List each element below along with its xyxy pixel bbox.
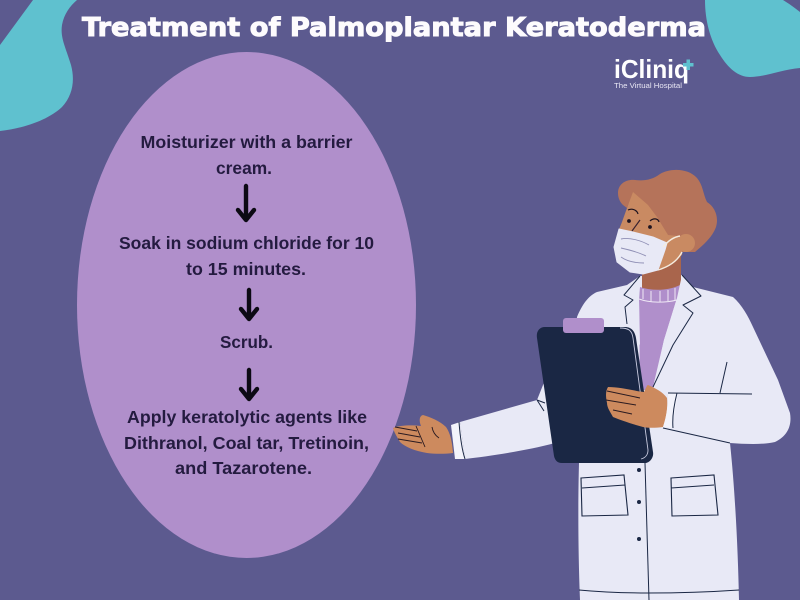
right pocket	[671, 475, 718, 516]
step 2 text: Soak in sodium chloride for 10	[119, 233, 374, 253]
left sleeve	[460, 380, 555, 459]
sleeve crease	[537, 400, 545, 411]
logo: iCliniq: The Virtual Hospital	[614, 81, 682, 90]
panel: treatment steps oval	[77, 52, 416, 558]
left lapel	[624, 276, 640, 345]
step 1 text: cream.	[216, 158, 272, 178]
step 4 text: Dithranol, Coal tar, Tretinoin,	[124, 433, 369, 453]
clipboard clip	[563, 318, 604, 333]
decorative blob: top left	[0, 0, 77, 131]
sweater collar	[639, 285, 680, 302]
decorative blob: top right	[705, 0, 800, 77]
step 2 text	[119, 233, 374, 279]
ear	[677, 234, 695, 252]
right cuff	[663, 393, 678, 428]
hair	[618, 170, 717, 252]
step 1 text	[140, 132, 353, 178]
title: Treatment of Palmoplantar Keratoderma	[82, 13, 706, 43]
clipboard	[537, 318, 653, 463]
step 3 text: Scrub.	[220, 332, 273, 352]
arrow 2	[241, 290, 257, 319]
step 4 text	[124, 407, 369, 478]
illustration: doctor	[393, 170, 790, 600]
step 4 text: Apply keratolytic agents like	[127, 407, 367, 427]
eyes and brows	[627, 209, 659, 231]
step 4 text: and Tazarotene.	[175, 458, 312, 478]
logo: iCliniq: iCliniq	[614, 54, 689, 84]
step 2 text: to 15 minutes.	[186, 259, 306, 279]
coat buttons	[637, 468, 641, 541]
pointing hand	[393, 415, 453, 454]
arrow 3	[241, 370, 257, 399]
face	[618, 190, 684, 270]
step 1 text: Moisturizer with a barrier	[140, 132, 353, 152]
holding hand	[606, 385, 667, 428]
arrow 1	[238, 186, 254, 220]
right lapel	[653, 275, 701, 387]
coat seams	[579, 362, 752, 600]
left cuff	[451, 422, 465, 459]
face mask	[614, 229, 682, 274]
coat body	[570, 275, 790, 600]
neck	[642, 250, 681, 293]
left pocket	[581, 475, 628, 516]
sweater	[639, 298, 677, 390]
